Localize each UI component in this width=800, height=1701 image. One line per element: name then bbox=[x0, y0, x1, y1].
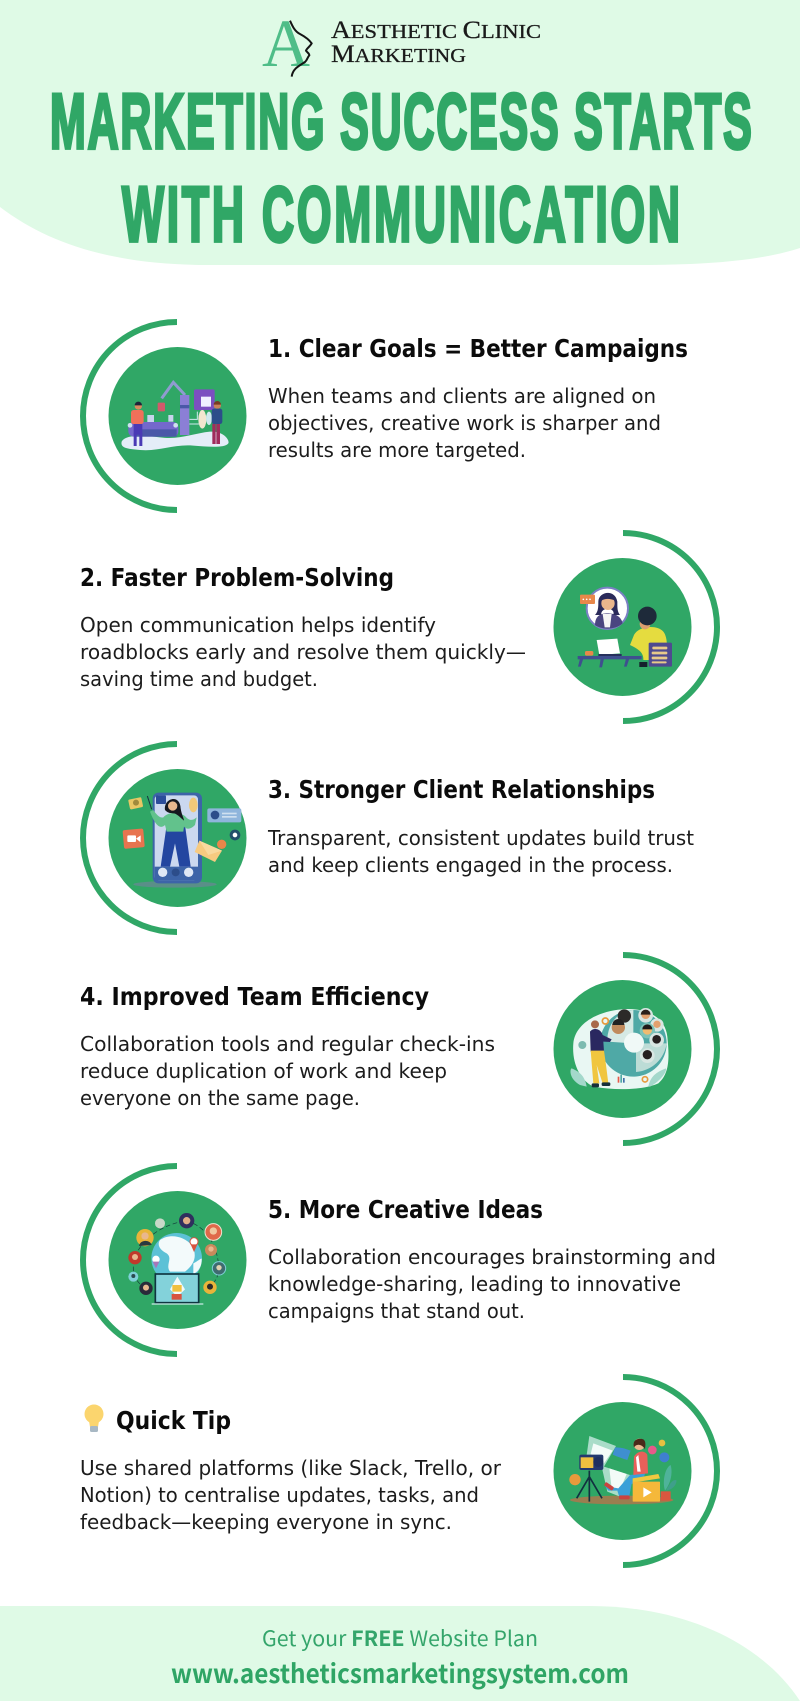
panel: 5 more creative ideas bbox=[83, 1166, 716, 1354]
body text: Transparent, consistent updates build trust bbox=[267, 826, 694, 850]
body text: Use shared platforms (like Slack, Trello, or bbox=[80, 1456, 502, 1480]
ring and icon: support call bbox=[554, 533, 717, 721]
body text bbox=[80, 613, 526, 691]
ring and icon: video call on phone bbox=[83, 744, 246, 932]
logo mark: letter A with face profile: A bbox=[262, 5, 310, 81]
ring and icon: global network bbox=[83, 1166, 246, 1354]
body text: knowledge-sharing, leading to innovative bbox=[268, 1272, 681, 1296]
icon: light bulb bbox=[84, 1404, 104, 1432]
title bbox=[50, 79, 752, 258]
body text: Open communication helps identify bbox=[80, 613, 436, 637]
body text: campaigns that stand out. bbox=[268, 1299, 525, 1323]
heading: 4. Improved Team Efficiency bbox=[80, 982, 429, 1011]
footer url: www.aestheticsmarketingsystem.com bbox=[171, 1654, 629, 1691]
heading: 1. Clear Goals = Better Campaigns bbox=[268, 334, 688, 363]
body text: results are more targeted. bbox=[268, 438, 526, 462]
title: WITH COMMUNICATION bbox=[122, 172, 680, 258]
body text: Collaboration tools and regular check-ins bbox=[80, 1032, 495, 1056]
ring and icon: factory team bbox=[83, 322, 246, 510]
body text: Collaboration encourages brainstorming and bbox=[268, 1245, 716, 1269]
body text: saving time and budget. bbox=[80, 667, 318, 691]
heading: Quick Tip bbox=[116, 1406, 231, 1435]
ring and icon: team chart bbox=[554, 955, 717, 1143]
panel: 3 stronger client relationships bbox=[83, 744, 694, 932]
body text bbox=[268, 1245, 716, 1323]
heading: 5. More Creative Ideas bbox=[268, 1195, 543, 1224]
footer call to action: Get your FREE Website Plan bbox=[262, 1623, 538, 1653]
body text: reduce duplication of work and keep bbox=[80, 1059, 447, 1083]
logo wordmark second line: MARKETING bbox=[331, 41, 466, 68]
logo bbox=[262, 5, 541, 81]
panel: 1 clear goals bbox=[83, 322, 688, 510]
header background bbox=[0, 0, 800, 265]
panel: 4 improved team efficiency bbox=[80, 955, 717, 1143]
ring and icon: video creator bbox=[554, 1377, 717, 1565]
body text: feedback—keeping everyone in sync. bbox=[80, 1510, 452, 1534]
body text bbox=[80, 1032, 495, 1110]
body text: roadblocks early and resolve them quickly— bbox=[80, 640, 526, 664]
logo wordmark: AESTHETIC CLINIC bbox=[331, 17, 541, 44]
heading: 2. Faster Problem-Solving bbox=[80, 563, 394, 592]
body text: everyone on the same page. bbox=[80, 1086, 360, 1110]
body text bbox=[268, 384, 661, 462]
body text bbox=[80, 1456, 502, 1534]
footer background bbox=[0, 1606, 800, 1701]
title: MARKETING SUCCESS STARTS bbox=[50, 79, 752, 165]
body text: Notion) to centralise updates, tasks, and bbox=[80, 1483, 479, 1507]
body text bbox=[267, 826, 694, 877]
body text: objectives, creative work is sharper and bbox=[268, 411, 661, 435]
heading bbox=[84, 1404, 231, 1435]
heading: 3. Stronger Client Relationships bbox=[268, 775, 655, 804]
body text: and keep clients engaged in the process. bbox=[268, 853, 673, 877]
panel: 2 faster problem-solving bbox=[80, 533, 717, 721]
body text: When teams and clients are aligned on bbox=[268, 384, 656, 408]
panel: quick tip bbox=[80, 1377, 717, 1565]
